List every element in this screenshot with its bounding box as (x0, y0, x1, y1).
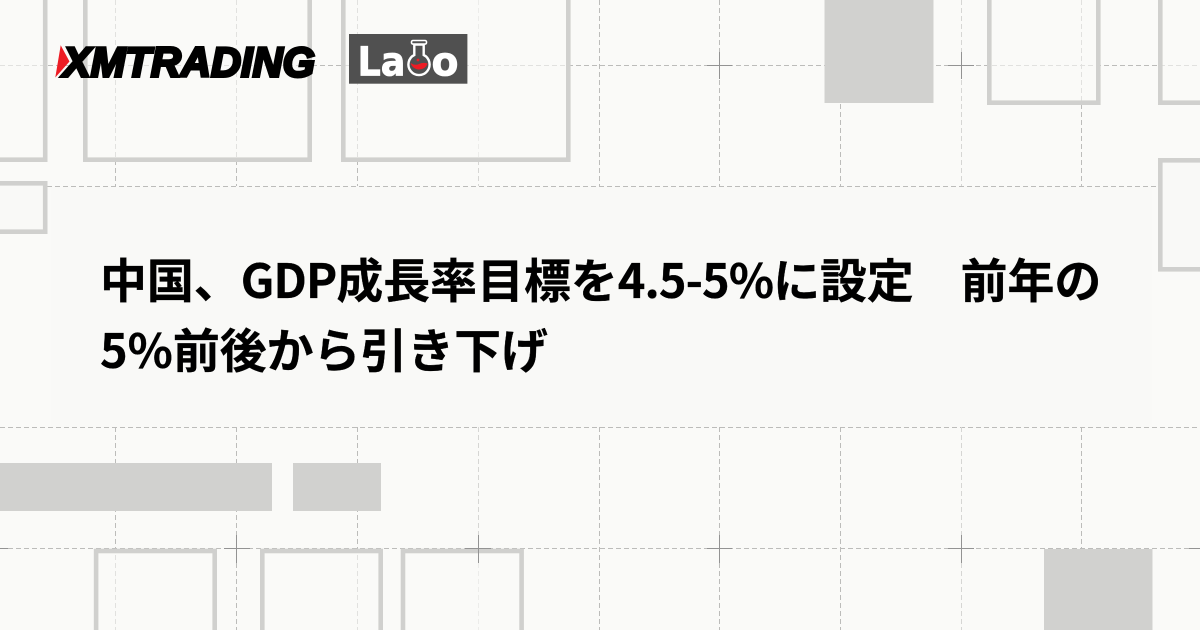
outline squares: bottom row (96, 551, 522, 630)
logo: Lab (349, 34, 468, 84)
logo: XMTRADING: XMTRADING (61, 38, 315, 85)
title (100, 244, 1101, 382)
title: 5%前後から引き下げ (100, 314, 548, 382)
title: 中国、GDP成長率目標を4.5-5%に設定 前年の (100, 244, 1101, 312)
panel: title background (51, 187, 1152, 427)
outline squares: top row (0, 0, 1200, 160)
outline squares: middle edges (0, 160, 1200, 269)
icon: flask (408, 40, 430, 75)
